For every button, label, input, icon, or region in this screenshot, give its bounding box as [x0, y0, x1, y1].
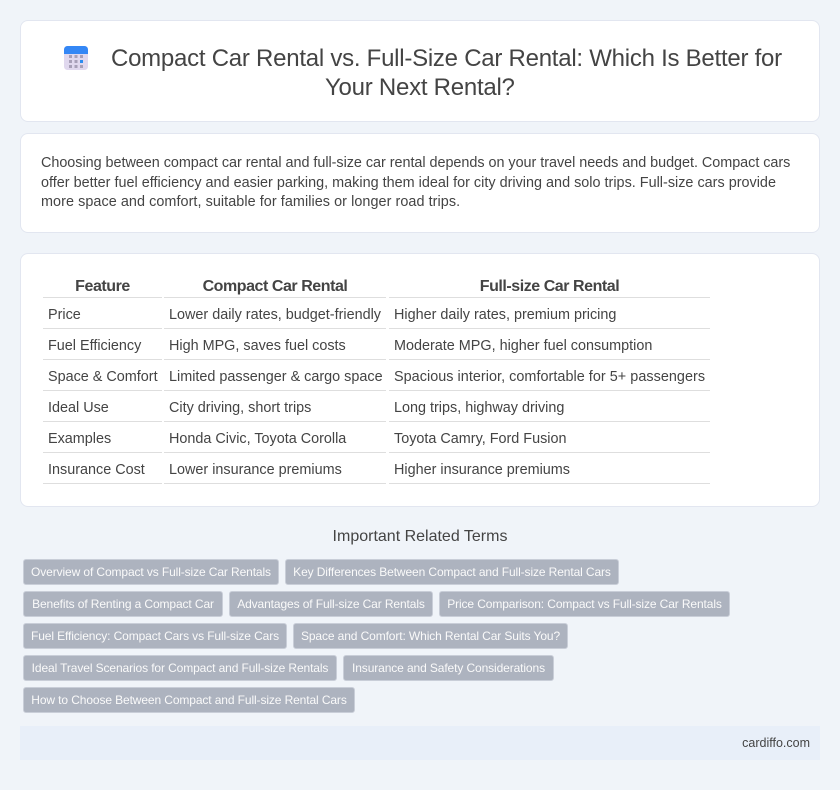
- comparison table: City driving, short trips: [169, 400, 311, 416]
- comparison table: Limited passenger & cargo space: [169, 369, 383, 385]
- table card: [20, 253, 820, 507]
- tag: Overview of Compact vs Full-size Car Rentals: [31, 565, 271, 579]
- description text: [41, 155, 790, 210]
- comparison table: Insurance Cost: [48, 462, 145, 478]
- tag: [285, 559, 619, 585]
- comparison table: Space & Comfort: [48, 369, 158, 385]
- description text: offer better fuel efficiency and easier parking, making them ideal for city driving and solo trips. Full-size cars provide: [41, 174, 776, 190]
- comparison table: Price: [48, 307, 81, 323]
- tag: [23, 655, 337, 681]
- tag: Fuel Efficiency: Compact Cars vs Full-size Cars: [31, 629, 279, 643]
- title: Your Next Rental?: [325, 74, 515, 101]
- tag: Benefits of Renting a Compact Car: [32, 597, 214, 611]
- tag: [293, 623, 568, 649]
- tag: Ideal Travel Scenarios for Compact and Full-size Rentals: [32, 661, 328, 675]
- comparison table: Examples: [48, 431, 111, 447]
- title: [111, 45, 782, 101]
- footer bar: [20, 726, 820, 760]
- tag: How to Choose Between Compact and Full-size Rental Cars: [31, 693, 347, 707]
- description text: Choosing between compact car rental and full-size car rental depends on your travel needs and budget. Compact cars: [41, 155, 790, 171]
- comparison table: Lower insurance premiums: [169, 462, 342, 478]
- comparison table: Long trips, highway driving: [394, 400, 564, 416]
- description text: more space and comfort, suitable for families or longer road trips.: [41, 194, 460, 210]
- tag: [23, 623, 287, 649]
- description card: [20, 133, 820, 233]
- comparison table: Lower daily rates, budget-friendly: [169, 307, 381, 323]
- tag: Space and Comfort: Which Rental Car Suits You?: [301, 629, 560, 643]
- tag: [343, 655, 554, 681]
- tag: Price Comparison: Compact vs Full-size Car Rentals: [447, 597, 722, 611]
- related terms heading: Important Related Terms: [333, 528, 507, 545]
- footer source: cardiffo.com: [742, 736, 810, 750]
- comparison table: Toyota Camry, Ford Fusion: [394, 431, 566, 447]
- comparison table: Spacious interior, comfortable for 5+ passengers: [394, 369, 705, 385]
- comparison table: Higher insurance premiums: [394, 462, 570, 478]
- header card: [20, 20, 820, 122]
- icon: calendar: [64, 46, 88, 70]
- table header: compact car rental: Compact Car Rental: [203, 278, 347, 295]
- tag: [23, 687, 355, 713]
- comparison table: Fuel Efficiency: [48, 338, 141, 354]
- comparison table: Ideal Use: [48, 400, 109, 416]
- tag: [439, 591, 730, 617]
- tag: [229, 591, 433, 617]
- tag: [23, 591, 223, 617]
- comparison table: High MPG, saves fuel costs: [169, 338, 346, 354]
- tag: [23, 559, 279, 585]
- table header: full-size car rental: Full-size Car Rental: [480, 278, 619, 295]
- tag: Insurance and Safety Considerations: [352, 661, 545, 675]
- table header: feature: Feature: [75, 278, 130, 295]
- comparison table: [43, 278, 710, 484]
- tag: Key Differences Between Compact and Full-size Rental Cars: [293, 565, 611, 579]
- comparison table: Moderate MPG, higher fuel consumption: [394, 338, 652, 354]
- tag: Advantages of Full-size Car Rentals: [237, 597, 425, 611]
- comparison table: Honda Civic, Toyota Corolla: [169, 431, 346, 447]
- title: Compact Car Rental vs. Full-Size Car Rental: Which Is Better for: [111, 45, 782, 72]
- related terms tags: [23, 559, 730, 713]
- comparison table: Higher daily rates, premium pricing: [394, 307, 616, 323]
